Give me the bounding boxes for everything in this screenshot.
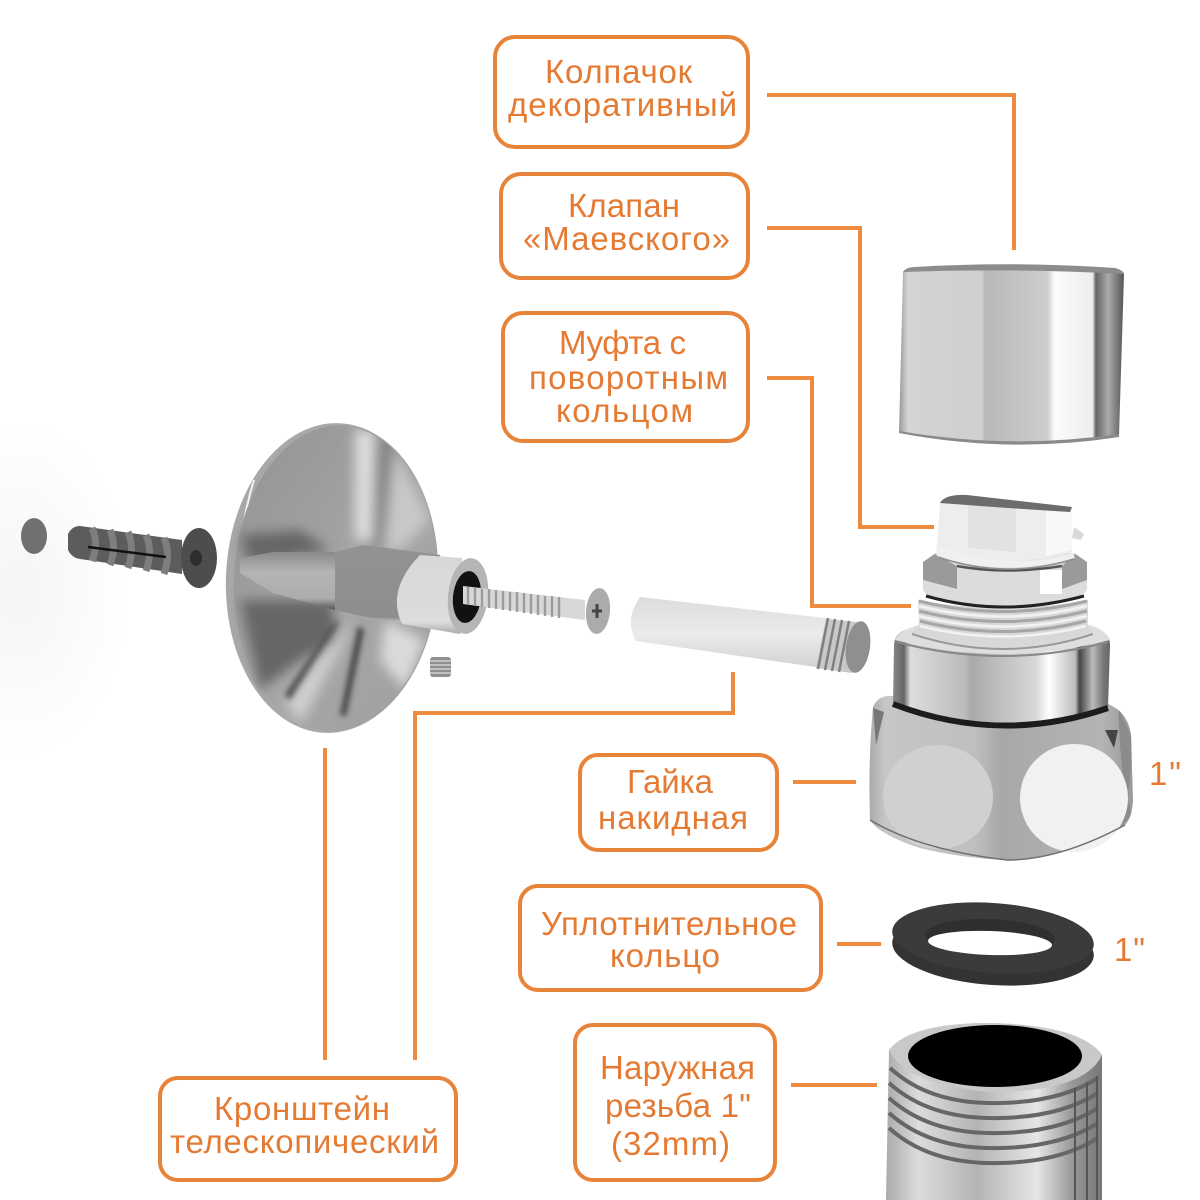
icon: air valve body (936, 495, 1084, 569)
icon: swivel ring collar (893, 618, 1110, 726)
label: sealing ring: кольцо (610, 937, 720, 974)
label: external thread: (32mm) (611, 1125, 730, 1162)
icon: wall dowel (68, 526, 217, 588)
label: decorative cap: декоративный (508, 86, 737, 123)
icon: long screw (463, 586, 612, 635)
label: coupling with swivel ring (503, 313, 748, 441)
icon: union nut (869, 696, 1133, 860)
label: external thread: резьба 1" (605, 1087, 751, 1124)
icon: set screw (430, 657, 451, 677)
label: Mayevsky valve: «Маевского» (523, 220, 730, 257)
label: external thread: Наружная (600, 1049, 755, 1086)
label: Mayevsky valve (501, 174, 748, 278)
label: telescopic bracket (160, 1078, 456, 1180)
label: sealing ring: Уплотнительное (541, 905, 797, 942)
icon: hex lock nut (923, 553, 1087, 608)
label: union nut: Гайка (627, 763, 714, 800)
label: coupling with swivel ring: поворотным (529, 359, 728, 396)
label: union nut (580, 755, 777, 850)
size label: gasket 1 inch: 1" (1114, 931, 1145, 968)
connector lines (325, 95, 1014, 1085)
label: telescopic bracket: Кронштейн (214, 1090, 390, 1127)
size label: nut 1 inch: 1" (1149, 755, 1181, 792)
icon: rubber gasket (890, 896, 1096, 992)
icon: bracket wall disc (226, 423, 438, 733)
label: sealing ring (520, 886, 821, 990)
label: Mayevsky valve: Клапан (568, 187, 680, 224)
label: external thread (575, 1025, 775, 1180)
label: coupling with swivel ring: Муфта с (559, 324, 686, 361)
label: decorative cap (495, 37, 748, 147)
label: decorative cap: Колпачок (545, 53, 693, 90)
icon: threaded neck (911, 600, 1093, 649)
icon: threaded pipe (886, 1023, 1102, 1200)
icon: plastic plug (21, 518, 47, 554)
label: coupling with swivel ring: кольцом (556, 392, 693, 429)
label: telescopic bracket: телескопический (170, 1123, 439, 1160)
label: union nut: накидная (598, 799, 748, 836)
icon: bracket sleeve (240, 545, 492, 636)
icon: telescopic rod (631, 597, 874, 674)
icon: chrome cap (899, 264, 1124, 445)
